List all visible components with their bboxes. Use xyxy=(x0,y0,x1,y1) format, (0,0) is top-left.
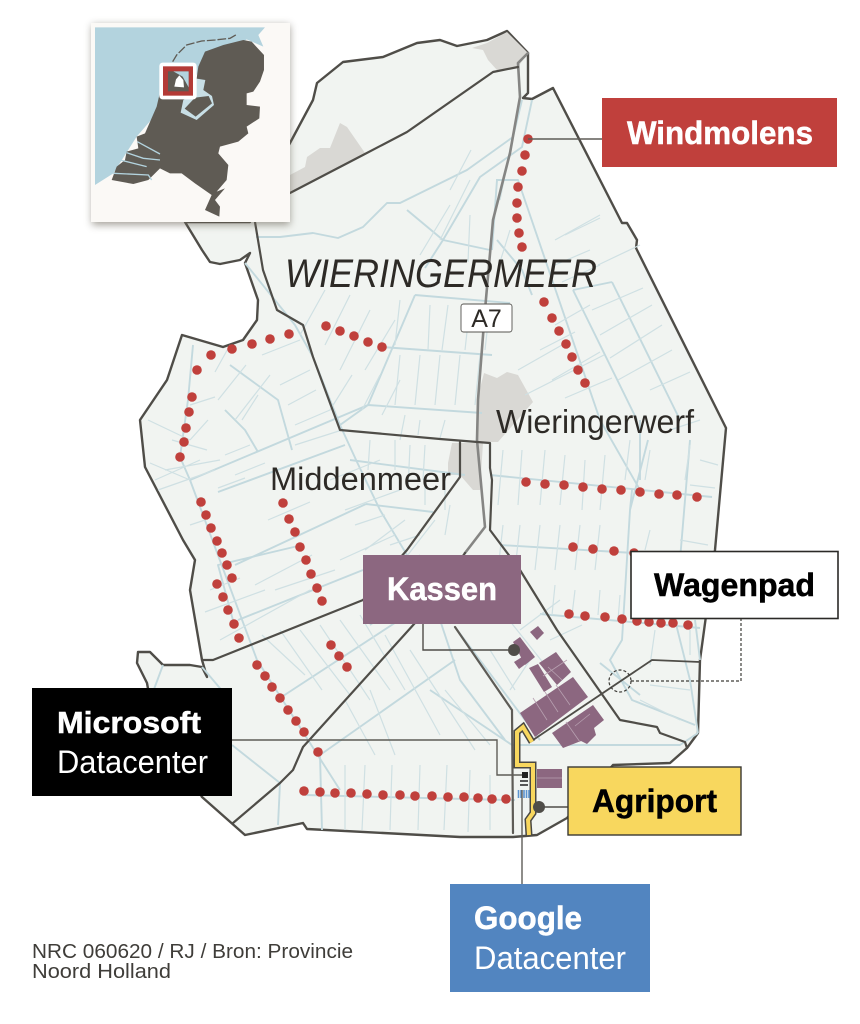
label: Wagenpad: Wagenpad xyxy=(654,567,815,603)
place name: Wieringermeer: WIERINGERMEER xyxy=(285,252,597,296)
Agriport road xyxy=(517,727,533,835)
label: Google Datacenter xyxy=(450,884,650,992)
source credit: Noord Holland xyxy=(32,960,171,983)
place name: Wieringerwerf: Wieringerwerf xyxy=(496,403,695,440)
label: Windmolens: Windmolens xyxy=(627,115,813,151)
label: Wagenpad xyxy=(631,552,838,618)
label: Windmolens xyxy=(602,98,837,167)
connector: Microsoft xyxy=(232,740,522,775)
label: Agriport: Agriport xyxy=(592,783,717,819)
connector: Wagenpad xyxy=(609,618,741,692)
A7 road xyxy=(465,53,528,553)
connector: Google xyxy=(521,790,523,884)
map: Wieringermeer polder xyxy=(137,31,726,837)
settlements xyxy=(290,32,533,490)
source credit: NRC 060620 / RJ / Bron: Provincie xyxy=(32,940,353,963)
road sign: A7 xyxy=(461,304,512,333)
label: Kassen: Kassen xyxy=(387,571,497,607)
Wagenpad road xyxy=(533,660,700,740)
inset map: Netherlands xyxy=(91,23,290,225)
Flevoland xyxy=(185,96,212,117)
wind turbines xyxy=(175,134,702,804)
locator box xyxy=(159,63,197,99)
canals xyxy=(150,100,712,830)
label: Microsoft Datacenter: Microsoft xyxy=(57,705,201,740)
connector: Windmolens xyxy=(528,138,602,140)
delta channels xyxy=(113,142,160,180)
label: Kassen xyxy=(363,555,521,624)
road sign: A7: A7 xyxy=(471,305,502,333)
label: Google Datacenter: Google xyxy=(474,900,582,936)
greenhouses xyxy=(513,626,604,788)
datacenter icons xyxy=(518,772,529,798)
connector: Agriport xyxy=(533,801,568,813)
roads and dikes xyxy=(202,53,700,833)
land area xyxy=(137,31,726,837)
sea xyxy=(95,27,265,185)
connector: Kassen xyxy=(423,624,520,656)
label: Microsoft Datacenter: Datacenter xyxy=(57,744,208,780)
label: Microsoft Datacenter xyxy=(32,688,232,796)
dike lines xyxy=(262,67,518,207)
label: Agriport xyxy=(568,767,741,835)
Wadden islands xyxy=(173,34,237,62)
source credit xyxy=(32,940,353,983)
place name: Middenmeer: Middenmeer xyxy=(270,461,451,497)
label: Google Datacenter: Datacenter xyxy=(474,940,626,976)
land of the Netherlands xyxy=(112,40,264,217)
IJsselmeer xyxy=(181,78,214,120)
